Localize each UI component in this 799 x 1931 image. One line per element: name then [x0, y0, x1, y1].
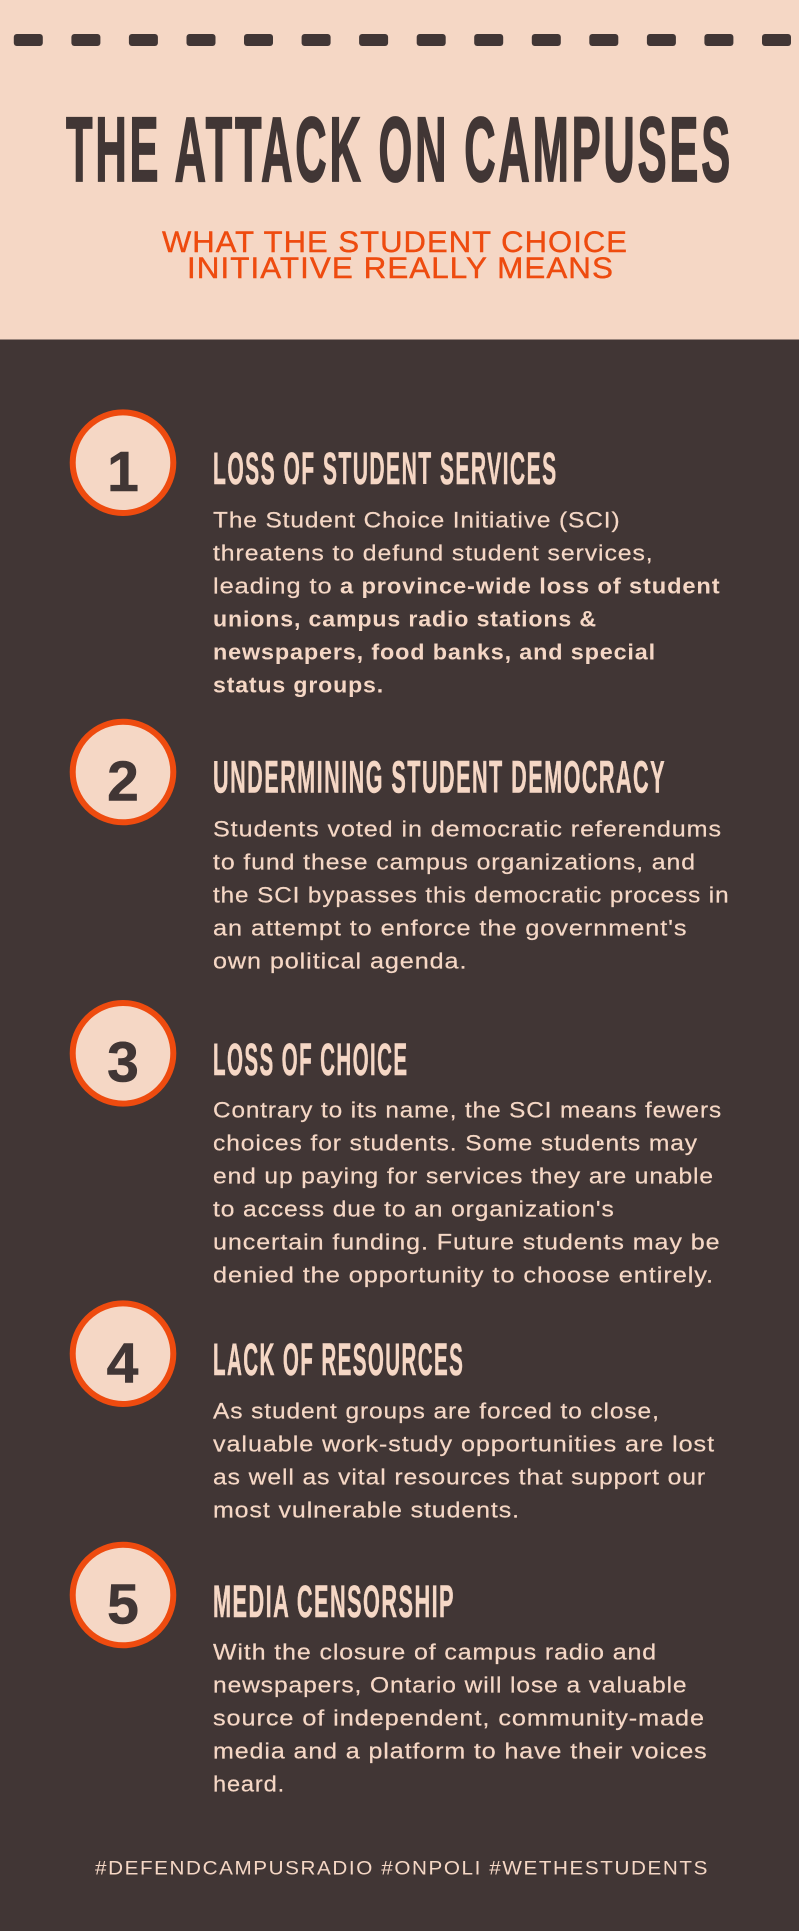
text block: item 5 body: heard. — [213, 1772, 285, 1797]
text block: item 2 body — [213, 817, 730, 974]
text block: item 3 body: end up paying for services they are unable — [213, 1164, 714, 1189]
text block: item 1 body: a province-wide loss of student — [340, 574, 720, 599]
text block: item 2 body: Students voted in democratic referendums — [213, 817, 722, 842]
icon: number 2 badge: 2 — [107, 749, 139, 813]
text block: item 1 body: threatens to defund student services, — [213, 541, 654, 566]
text block: item 3 body: uncertain funding. Future students may be — [213, 1230, 720, 1255]
text block: item 4 body — [213, 1399, 715, 1523]
dashed line — [14, 34, 791, 46]
text block: item 1 body: status groups. — [213, 673, 384, 698]
text block: item 1 body: unions, campus radio stations & — [213, 607, 597, 632]
text block: item 4 body: valuable work-study opportunities are lost — [213, 1432, 715, 1457]
icon: number 1 badge: 1 — [107, 440, 139, 504]
text block: item 2 body: the SCI bypasses this democratic process in — [213, 883, 730, 908]
text block: item 3 body — [213, 1098, 722, 1288]
panel: item 5 media censorship — [73, 1545, 708, 1797]
icon: number 4 badge — [73, 1303, 173, 1404]
text block: item 1 body: newspapers, food banks, and special — [213, 640, 656, 665]
text block: item 5 body: With the closure of campus radio and — [213, 1640, 657, 1665]
text block: item 5 body: newspapers, Ontario will lose a valuable — [213, 1673, 688, 1698]
text block: item 4 body: As student groups are forced to close, — [213, 1399, 660, 1424]
panel: item 3 loss of choice — [73, 1003, 722, 1288]
subtitle: INITIATIVE REALLY MEANS — [187, 252, 614, 285]
text block: item 4 body: most vulnerable students. — [213, 1498, 520, 1523]
subtitle — [162, 226, 628, 285]
icon: number 5 badge: 5 — [107, 1572, 139, 1636]
text block: item 1 body: leading to — [213, 574, 333, 599]
panel: item 3 loss of choice: LOSS OF CHOICE — [213, 1034, 408, 1085]
text block: item 3 body: to access due to an organization's — [213, 1197, 615, 1222]
subtitle: WHAT THE STUDENT CHOICE — [162, 226, 628, 259]
panel: item 2 undermining student democracy — [73, 722, 729, 974]
icon: number 4 badge: 4 — [107, 1331, 139, 1395]
text block: item 3 body: denied the opportunity to choose entirely. — [213, 1263, 714, 1288]
text block: item 5 body: source of independent, community-made — [213, 1706, 705, 1731]
panel: item 4 lack of resources: LACK OF RESOURCES — [213, 1334, 464, 1385]
icon: number 5 badge — [73, 1545, 173, 1645]
text block: item 2 body: to fund these campus organizations, and — [213, 850, 696, 875]
footer hashtags: #DEFENDCAMPUSRADIO #ONPOLI #WETHESTUDENTS — [95, 1857, 709, 1879]
text block: item 1 body — [213, 508, 720, 698]
panel: item 4 lack of resources — [73, 1303, 715, 1523]
text block: item 2 body: own political agenda. — [213, 949, 467, 974]
panel: item 5 media censorship: MEDIA CENSORSHIP — [213, 1576, 455, 1627]
text block: item 3 body: choices for students. Some students may — [213, 1131, 698, 1156]
text block: item 5 body: media and a platform to have their voices — [213, 1739, 708, 1764]
text block: item 3 body: Contrary to its name, the SCI means fewers — [213, 1098, 722, 1123]
text block: item 4 body: as well as vital resources that support our — [213, 1465, 706, 1490]
icon: number 1 badge — [73, 412, 173, 513]
text block: item 5 body — [213, 1640, 708, 1797]
icon: number 2 badge — [73, 722, 173, 822]
icon: number 3 badge: 3 — [107, 1031, 139, 1095]
panel: item 1 loss of student services — [73, 412, 720, 698]
panel: header — [0, 0, 799, 340]
text block: item 1 body: The Student Choice Initiative (SCI) — [213, 508, 620, 533]
text block: item 2 body: an attempt to enforce the government's — [213, 916, 688, 941]
icon: number 3 badge — [73, 1003, 173, 1104]
